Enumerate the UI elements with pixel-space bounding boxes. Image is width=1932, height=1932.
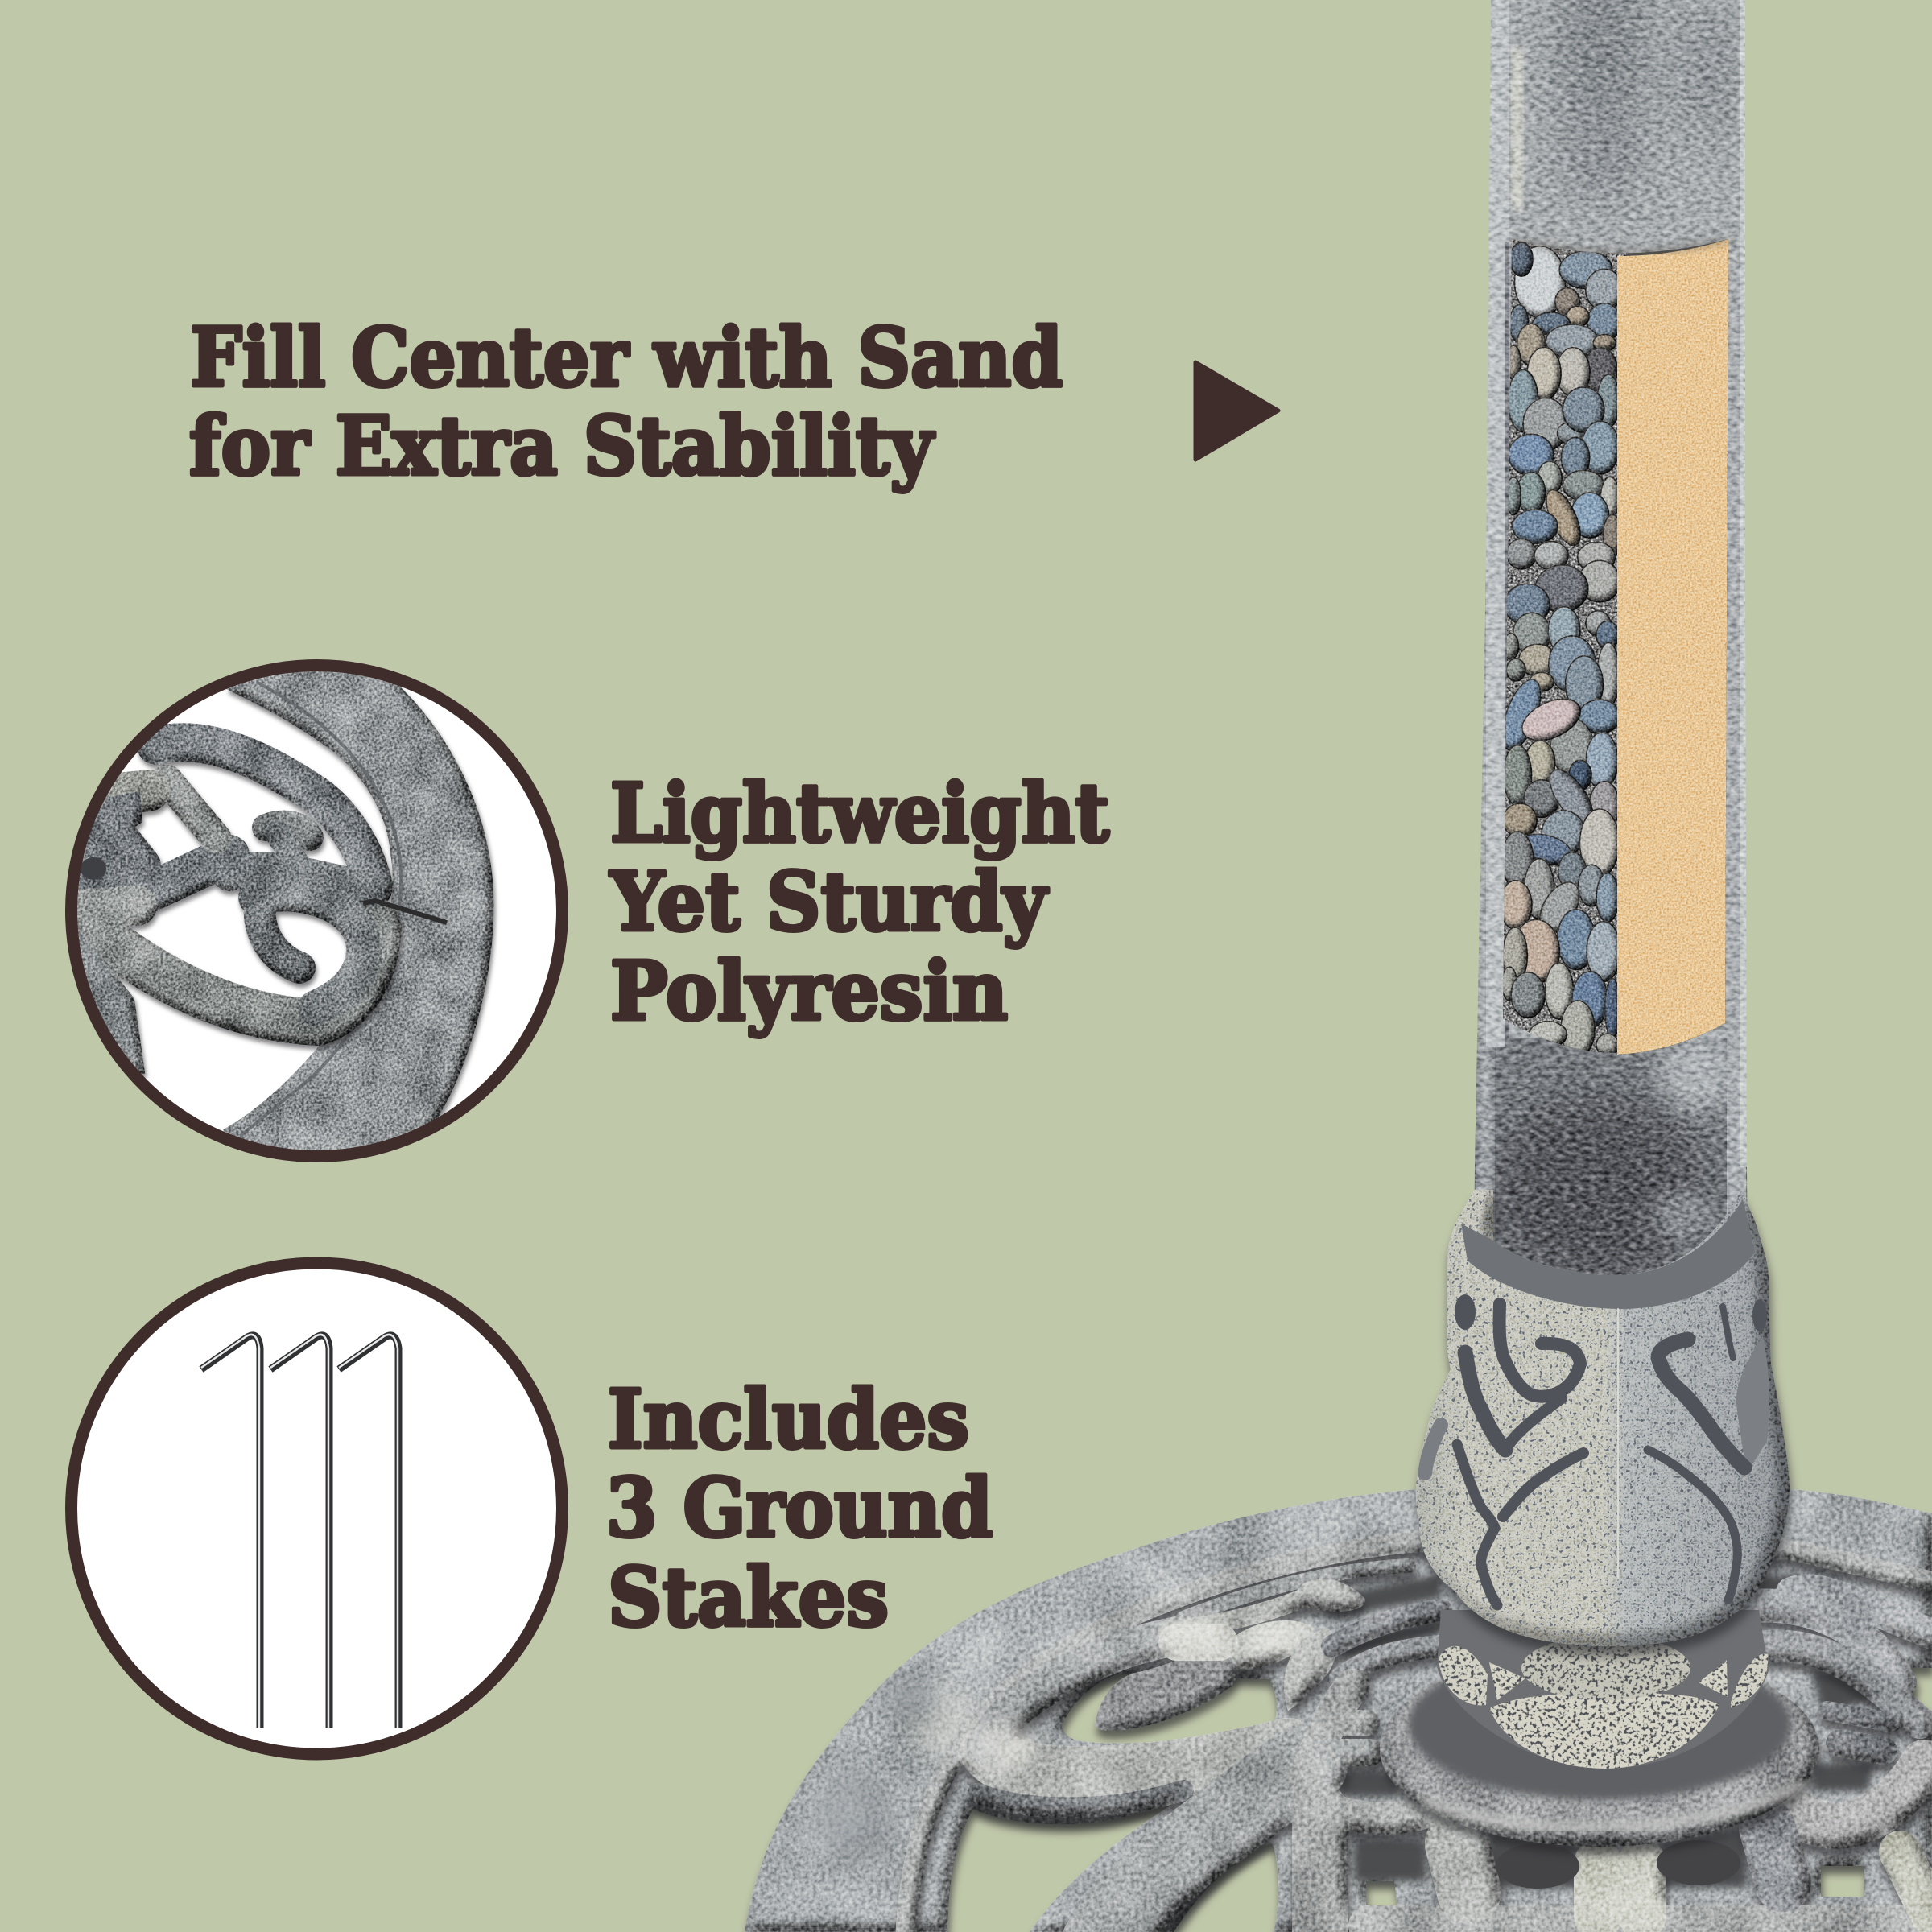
dark ornament veins bbox=[1425, 1294, 1767, 1605]
text: lightweight polyresin: Yet Sturdy bbox=[609, 854, 1049, 949]
cutaway: rocks bbox=[1495, 242, 1623, 1057]
cutaway dark backing bbox=[1503, 239, 1728, 1053]
text: ground stakes: 3 Ground bbox=[606, 1460, 993, 1555]
raised second ring bbox=[906, 1542, 1932, 1932]
speckled neck lobes bbox=[1439, 1636, 1768, 1769]
heading: fill center with sand: Fill Center with Sand bbox=[190, 310, 1063, 405]
text: lightweight polyresin: Lightweight bbox=[610, 766, 1109, 861]
collar rim band bbox=[1461, 1199, 1755, 1309]
flange dark inner ring bbox=[1408, 1649, 1803, 1827]
dark pockets around hub bbox=[1320, 1574, 1880, 1888]
text: ground stakes: Stakes bbox=[608, 1550, 889, 1645]
pole shell bbox=[1475, 0, 1747, 1275]
stake 1 bbox=[201, 1335, 260, 1728]
text: lightweight polyresin bbox=[609, 766, 1109, 1038]
base mottling bbox=[813, 1678, 977, 1868]
stake 3 bbox=[339, 1335, 398, 1728]
outer rim crescent bbox=[223, 660, 493, 1175]
product: pole with cutaway bbox=[1475, 0, 1747, 1275]
scroll highlights bbox=[974, 1620, 1299, 1771]
cutaway inner shadow bbox=[1512, 239, 1728, 253]
product: ornate collar and bulb bbox=[1416, 1190, 1790, 1646]
rim groove bbox=[242, 683, 401, 1135]
text: lightweight polyresin: Polyresin bbox=[610, 943, 1008, 1038]
circle: ground stakes bbox=[71, 1263, 562, 1754]
text: ground stakes: Includes bbox=[608, 1372, 969, 1467]
heading: fill center with sand bbox=[189, 310, 1063, 493]
black hole pin bbox=[363, 901, 447, 923]
heading: fill center with sand: for Extra Stability bbox=[189, 398, 935, 493]
arrow pointing to pole bbox=[1195, 362, 1278, 460]
text: ground stakes bbox=[606, 1372, 993, 1645]
dark bolt bbox=[80, 857, 106, 880]
hub flange bbox=[1380, 1650, 1819, 1847]
right stripe panel bbox=[1736, 1335, 1769, 1473]
bolts bbox=[1496, 1840, 1740, 1889]
cutaway: sand bbox=[1617, 239, 1728, 1055]
ring border bbox=[71, 665, 562, 1156]
stake 2 bbox=[270, 1335, 329, 1728]
scrollwork tubes bbox=[906, 1542, 1932, 1932]
circle: polyresin close-up bbox=[71, 660, 564, 1175]
scroll bands bbox=[76, 742, 378, 1072]
base plate with openings bbox=[745, 1489, 1932, 1932]
product: base of umbrella stand bbox=[745, 1489, 1932, 1932]
neck body bbox=[1437, 1610, 1769, 1769]
